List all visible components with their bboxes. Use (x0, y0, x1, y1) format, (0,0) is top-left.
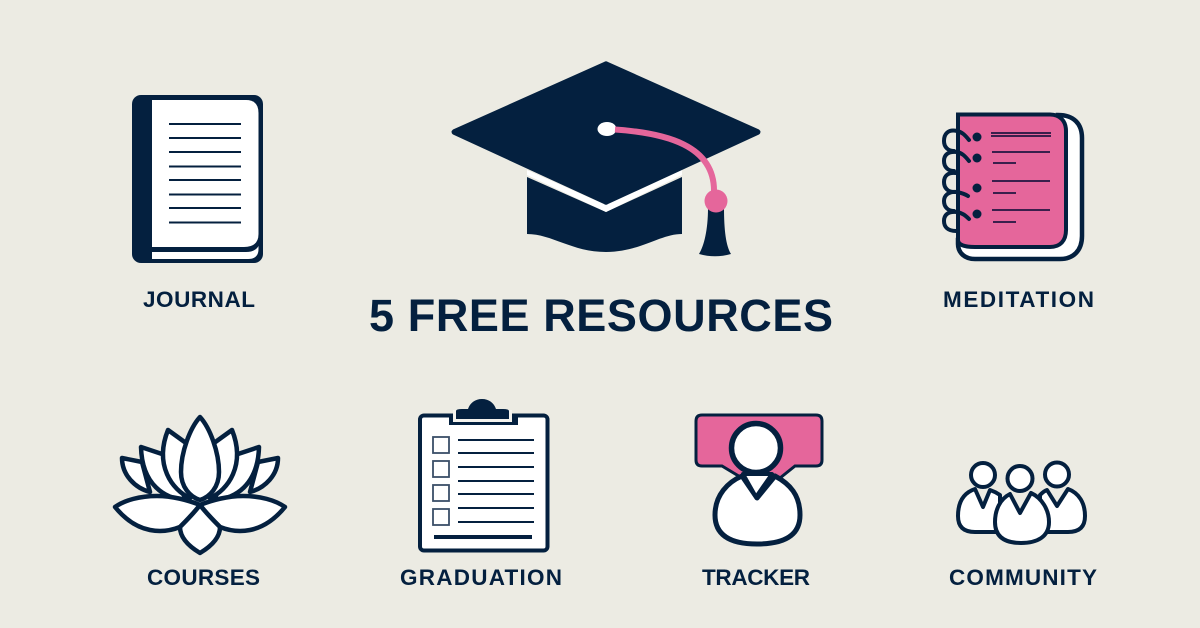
icon: lotus (115, 417, 285, 553)
label: graduation: GRADUATION (400, 565, 562, 590)
icon: community group (958, 462, 1085, 543)
label: meditation: MEDITATION (943, 287, 1094, 312)
icon: spiral notebook (944, 114, 1082, 259)
label: journal: JOURNAL (143, 287, 255, 312)
icon: person with speech bubble (696, 415, 822, 544)
label: community: COMMUNITY (949, 565, 1097, 590)
icon: clipboard checklist (420, 399, 548, 550)
title: 5 FREE RESOURCES (369, 290, 833, 341)
icon: graduation cap (452, 61, 760, 256)
label: courses: COURSES (147, 565, 260, 590)
label: tracker: TRACKER (702, 565, 810, 590)
icon: journal (132, 95, 263, 263)
